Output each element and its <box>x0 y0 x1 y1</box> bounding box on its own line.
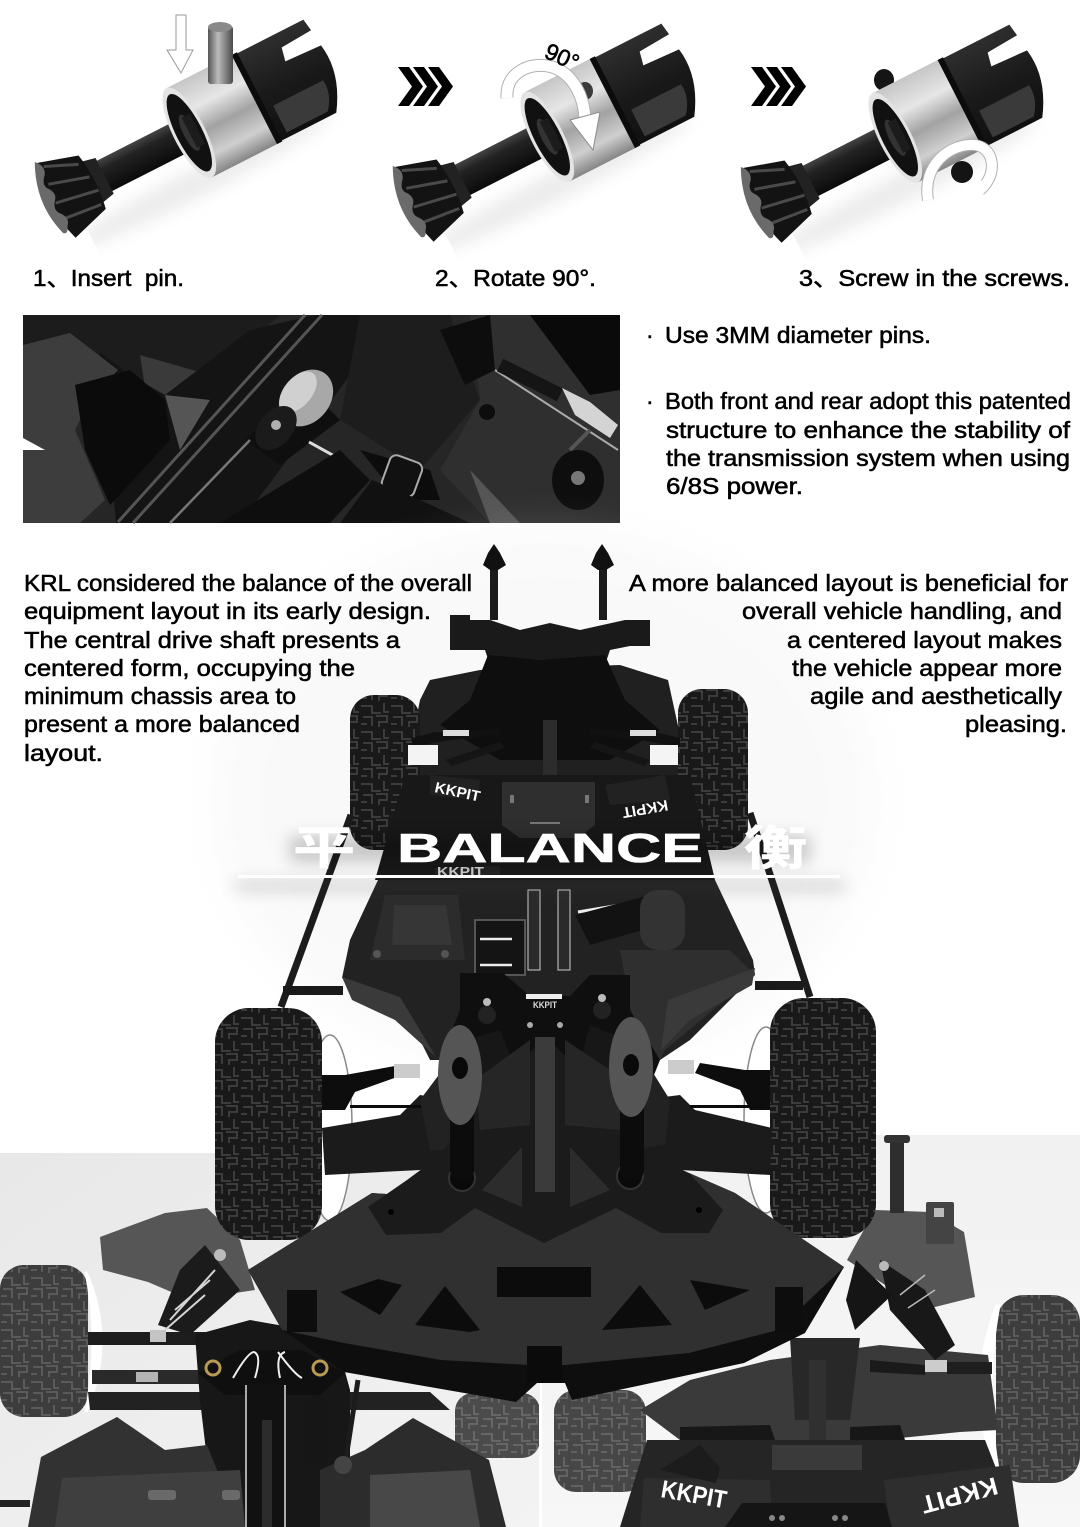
strap logo: KKPIT <box>918 1471 1001 1518</box>
strap right <box>884 1465 1019 1527</box>
heading: BALANCE band <box>235 822 845 890</box>
caption 1: 1、Insert pin. <box>33 265 184 291</box>
rear wing mount <box>450 615 650 665</box>
character right: 衡 <box>744 822 807 875</box>
text block: left balance description: KRL considered the balance of the overall <box>24 570 472 596</box>
panel: bottom right photo of rear suspension <box>542 1135 1080 1527</box>
front shock tower <box>440 973 660 1110</box>
text block: left balance description <box>24 570 472 766</box>
front lower arms left <box>322 1064 450 1175</box>
heading shadow <box>290 836 810 862</box>
logo: KKPIT <box>437 864 484 879</box>
strap left with logo <box>430 775 482 805</box>
bumper foam <box>248 1173 844 1402</box>
tub <box>342 880 755 1060</box>
logo: KKPIT <box>621 796 669 821</box>
chevron arrows: step 2 to 3 <box>751 67 806 106</box>
left tyre <box>554 1390 646 1492</box>
text block: pin notes: · <box>646 322 654 348</box>
center spine <box>790 1338 860 1527</box>
car: main chassis <box>215 544 876 1402</box>
logo: KKPIT <box>433 779 482 805</box>
plate sides <box>475 1040 625 1130</box>
body mounts <box>438 1017 653 1125</box>
screw <box>951 161 973 183</box>
text block: left balance description: The central drive shaft presents a <box>24 627 400 653</box>
arrow: rotation arc <box>507 65 600 150</box>
upper body <box>847 1210 975 1310</box>
center spine <box>245 1385 286 1527</box>
radio box <box>370 895 465 960</box>
text block: right balance description: A more balanced layout is beneficial for <box>629 570 1068 596</box>
suspension arms <box>640 1345 998 1440</box>
arm with ball joint <box>870 1360 992 1375</box>
rear tyre right <box>678 689 748 850</box>
mount piece <box>884 1135 954 1244</box>
center plate <box>502 782 595 838</box>
wings <box>342 968 755 1057</box>
logos at title band <box>435 864 500 879</box>
text block: left balance description: minimum chassis area to <box>24 683 296 709</box>
arrow: rotation C <box>927 145 992 200</box>
front lower arms right <box>640 1060 772 1175</box>
caption 3: 3、Screw in the screws. <box>799 265 1070 291</box>
wing <box>100 1208 255 1300</box>
plate with holes <box>725 1503 892 1527</box>
underline <box>238 875 840 878</box>
tub right floor <box>620 950 755 1060</box>
chevron arrows: step 1 to 2 <box>398 67 453 106</box>
text block: right balance description: a centered layout makes <box>787 627 1062 653</box>
step 1: insert pin <box>20 15 358 263</box>
front tyre right <box>744 998 876 1238</box>
shock rods <box>450 1100 644 1180</box>
foam cut-outs <box>287 1267 803 1383</box>
rear dark core <box>440 655 660 760</box>
plate hex bolts <box>388 1163 702 1215</box>
shaft assembly <box>726 21 1064 268</box>
text block: pin notes: 6/8S power. <box>666 473 803 499</box>
text block: pin notes: · <box>646 388 654 414</box>
step 2: rotate 90 degrees <box>378 20 716 267</box>
mid chassis <box>375 775 715 880</box>
right tyre <box>982 1295 1080 1483</box>
arrow: downward <box>167 15 193 73</box>
center structure with silver plates <box>475 890 685 975</box>
title word: BALANCE <box>397 825 703 871</box>
front tyre left <box>215 1008 352 1240</box>
text block: pin notes: structure to enhance the stability of <box>666 417 1071 443</box>
steering link <box>305 1380 358 1474</box>
text block: right balance description: agile and aesthetically <box>810 683 1063 709</box>
plate foam windows <box>482 1147 610 1207</box>
band shadow <box>235 882 845 890</box>
rear tyre left <box>350 695 420 850</box>
right tyre <box>455 1393 540 1458</box>
left tyre <box>0 1265 101 1417</box>
text block: right balance description: the vehicle appear more <box>792 655 1062 681</box>
foam top surface <box>248 1173 844 1365</box>
side rails <box>281 813 810 1007</box>
text block: left balance description: layout. <box>24 740 103 766</box>
text block: right balance description: pleasing. <box>965 711 1067 737</box>
tower and center body <box>195 1320 350 1527</box>
rear arms right <box>590 728 680 766</box>
text block: pin notes: Use 3MM diameter pins. <box>665 322 931 348</box>
step 3: screw in <box>726 21 1064 268</box>
label: 90 degrees: 90° <box>541 38 583 76</box>
panel: bottom left photo of rear-end chassis <box>0 1153 540 1527</box>
shock bottoms <box>420 1025 670 1150</box>
shaft assembly <box>378 20 716 267</box>
rear body <box>404 665 690 780</box>
strap logo: KKPIT <box>659 1475 729 1514</box>
center divider <box>539 1400 541 1527</box>
pin <box>208 22 233 84</box>
center rear gearbox <box>543 720 557 780</box>
text block: right balance description: overall vehicle handling, and <box>742 598 1062 624</box>
text block: right balance description <box>629 570 1068 737</box>
step captions <box>33 265 1070 291</box>
shock <box>846 1260 955 1360</box>
screw behind <box>874 69 894 91</box>
suspension arms <box>88 1330 450 1410</box>
rear tray <box>620 1440 1019 1527</box>
character left: 平 <box>293 823 355 874</box>
strap right with logo <box>605 775 670 821</box>
shock <box>158 1245 240 1335</box>
text block: pin notes: the transmission system when using <box>666 445 1070 471</box>
caption 2: 2、Rotate 90°. <box>435 265 596 291</box>
rear shock towers <box>483 544 614 620</box>
text block: left balance description: present a more balanced <box>24 711 300 737</box>
tower logo: KKPIT <box>533 1000 557 1010</box>
panel: detail photo of installed drive cup <box>23 315 620 523</box>
brace with white outline <box>198 1350 345 1395</box>
plate rib <box>535 1037 555 1192</box>
haze behind car <box>215 530 875 1070</box>
chassis tub <box>0 1417 506 1527</box>
rear arms left <box>408 728 505 766</box>
pin hole <box>577 82 593 100</box>
text block: left balance description: equipment layout in its early design. <box>24 598 431 624</box>
strap left <box>640 1445 772 1527</box>
text block: pin notes: Both front and rear adopt this patented <box>665 388 1071 414</box>
text block: pin notes <box>646 322 1071 499</box>
text block: left balance description: centered form, occupying the <box>24 655 355 681</box>
tray plate <box>680 1425 905 1470</box>
shaft assembly <box>20 16 358 263</box>
steel chevron plate <box>368 1037 723 1243</box>
